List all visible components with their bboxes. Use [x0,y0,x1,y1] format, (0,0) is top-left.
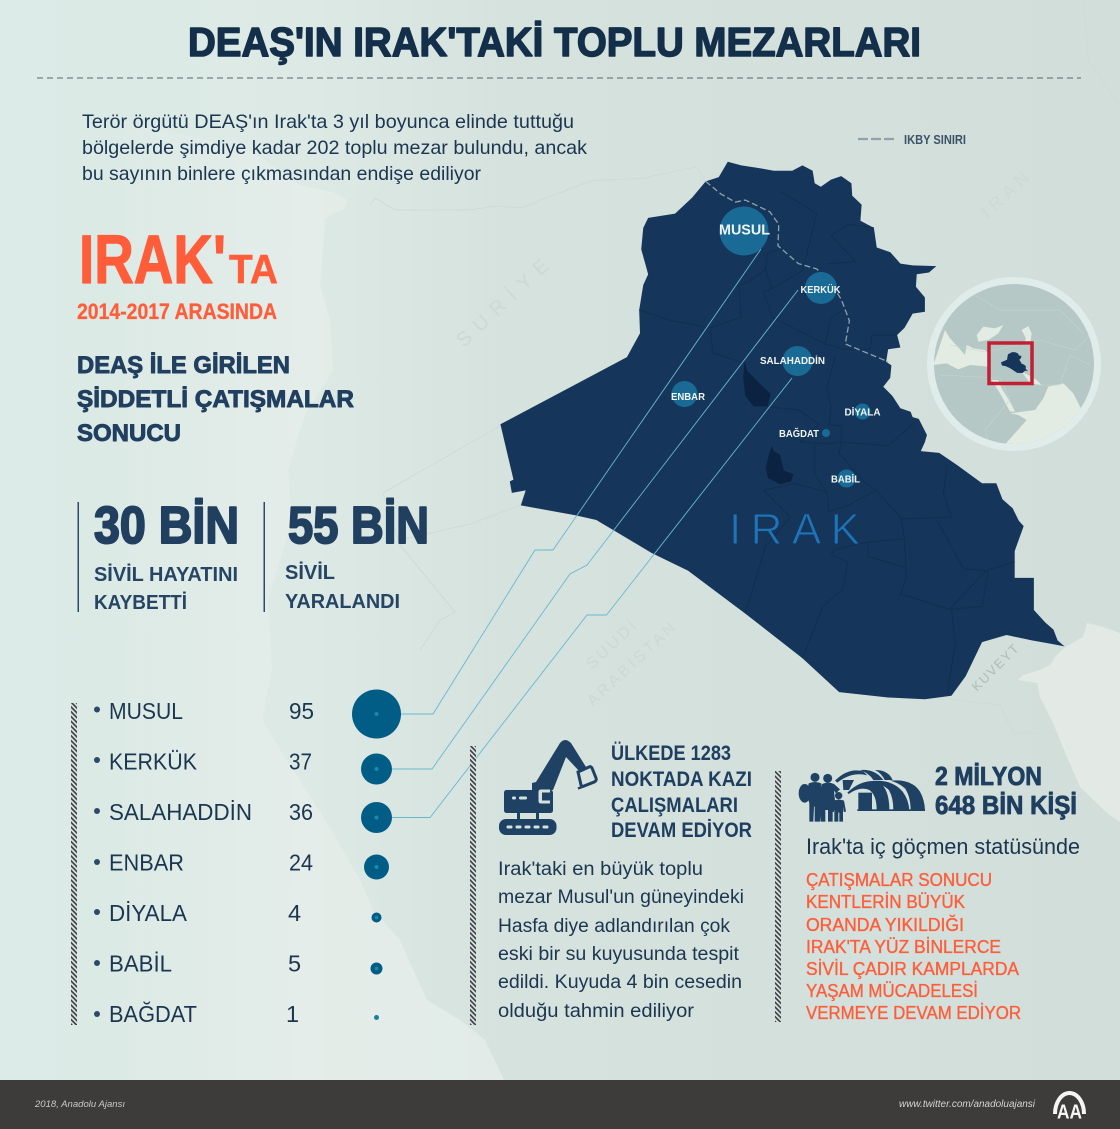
row: Babil: BABİL [109,950,172,976]
row: Bağdat: 1 [286,1001,299,1027]
orange text block: IRAK'TA YÜZ BİNLERCE [806,937,1001,957]
stat: 55 bin: SİVİL [285,561,335,584]
row: Enbar: ENBAR [109,850,184,876]
map city bubbles: MUSUL [719,222,770,238]
title: DEAŞ'IN IRAK'TAKİ TOPLU MEZARLARI [188,19,921,65]
stat: 30 bin: KAYBETTİ [94,591,187,614]
country labels [452,168,1033,710]
text: largest mass grave: Irak'taki en büyük toplu [498,859,703,880]
map city bubbles: KERKÜK [800,283,841,296]
map city bubbles [671,206,881,488]
subheading: ŞİDDETLİ ÇATIŞMALAR [77,386,354,413]
heading: excavation: ÇALIŞMALARI [611,794,738,817]
stat: 30 bin [78,497,239,614]
heading: excavation: DEVAM EDİYOR [611,819,752,842]
text: largest mass grave: olduğu tahmin ediliyor [498,1001,695,1022]
hatched divider: middle [470,746,476,1025]
row: Diyala: DİYALA [109,900,187,926]
heading: Irak'ta 2014-2017: IRAK' [79,221,226,298]
heading: Irak'ta 2014-2017: TA [229,246,278,292]
orange text block [806,870,1021,1023]
row: Kerkük: 37 [289,748,312,774]
map city bubbles: BAĞDAT [779,427,820,440]
row: Diyala: 4 [288,900,301,926]
row: Babil: 5 [288,950,301,976]
intro text: Terör örgütü DEAŞ'ın Irak'ta 3 yıl boyunca elinde tuttuğu [82,111,574,133]
heading: Irak'ta 2014-2017 [77,221,278,324]
row: Babil [94,950,382,976]
row: Musul: 95 [289,698,314,724]
country labels: KUVEYT [969,641,1022,694]
heading: excavation [611,742,752,842]
orange text block: VERMEYE DEVAM EDİYOR [806,1003,1021,1023]
row: Musul: MUSUL [109,698,183,724]
hatched divider: right [775,771,781,1022]
subheading: SONUCU [77,420,181,447]
map: Iraq [500,162,1064,699]
locator globe [927,277,1101,451]
row: Enbar: 24 [289,850,313,876]
heading: displaced people [935,761,1077,820]
logo: AA [1055,1093,1084,1124]
intro text: bu sayının binlere çıkmasından endişe ediliyor [82,163,481,185]
footer [0,1080,1120,1129]
stat: 55 bin: YARALANDI [285,590,400,613]
orange text block: KENTLERİN BÜYÜK [806,892,965,912]
text: largest mass grave: eski bir su kuyusunda tespit [498,944,740,965]
heading: displaced people: 648 BİN KİŞİ [935,790,1077,820]
icon: family and tents [799,770,925,822]
hatched divider: list [71,703,77,1025]
country labels: ARABİSTAN [583,618,679,710]
row: Bağdat [94,1001,379,1027]
legend: IKBY border: IKBY SINIRI [904,132,966,147]
map city bubbles: ENBAR [671,391,705,403]
logo: AA: AA [1057,1102,1082,1124]
heading: excavation: ÜLKEDE 1283 [611,742,731,765]
row: Kerkük [94,748,392,784]
heading: displaced people: 2 MİLYON [935,761,1042,791]
stat: 30 bin: SİVİL HAYATINI [94,563,238,586]
map city bubbles: SALAHADDİN [760,354,825,367]
text: largest mass grave: Hasfa diye adlandırılan çok [498,916,731,937]
leader lines [391,249,798,818]
text: largest mass grave: edildi. Kuyuda 4 bin cesedin [498,972,742,993]
heading: excavation: NOKTADA KAZI [611,768,752,791]
row: Musul [94,690,401,738]
intro text [82,111,587,185]
orange text block: SİVİL ÇADIR KAMPLARDA [806,959,1019,979]
heading: Irak'ta 2014-2017: 2014-2017 ARASINDA [77,299,277,324]
map city bubbles: DİYALA [844,406,881,418]
orange text block: YAŞAM MÜCADELESİ [806,981,978,1001]
row: Bağdat: BAĞDAT [109,1001,197,1027]
map city bubbles: BABİL [831,472,861,486]
footer: 2018, Anadolu Ajansı [34,1099,125,1110]
country labels: SUUDİ [582,617,640,673]
stat: 30 bin: 30 BİN [94,497,239,555]
row: Salahaddin [94,799,392,833]
footer: www.twitter.com/anadoluajansi [899,1099,1036,1110]
legend: IKBY border [858,132,966,147]
icon: excavator [499,740,596,835]
row: Salahaddin: SALAHADDİN [109,799,252,825]
stat: 55 bin [264,497,429,613]
row: Enbar [94,850,389,880]
row: Salahaddin: 36 [289,799,313,825]
map label: IRAK: IRAK [729,505,860,554]
row: Kerkük: KERKÜK [109,748,197,774]
text: largest mass grave: mezar Musul'un güneyindeki [498,887,744,908]
subheading [77,352,354,447]
subtitle: internal migrant status: Irak'ta iç göçmen statüsünde [806,834,1080,859]
IKBY dashed border [706,181,888,362]
stat: 55 bin: 55 BİN [288,497,429,555]
text: largest mass grave [498,859,744,1022]
orange text block: ORANDA YIKILDIĞI [806,914,964,935]
orange text block: ÇATIŞMALAR SONUCU [806,870,992,890]
country labels: IRAN [977,168,1033,222]
row: Diyala [94,900,382,926]
list: mass graves by province [94,690,401,1027]
country labels: SURİYE [452,254,554,352]
subheading: DEAŞ İLE GİRİLEN [77,352,290,379]
intro text: bölgelerde şimdiye kadar 202 toplu mezar bulundu, ancak [82,137,587,159]
